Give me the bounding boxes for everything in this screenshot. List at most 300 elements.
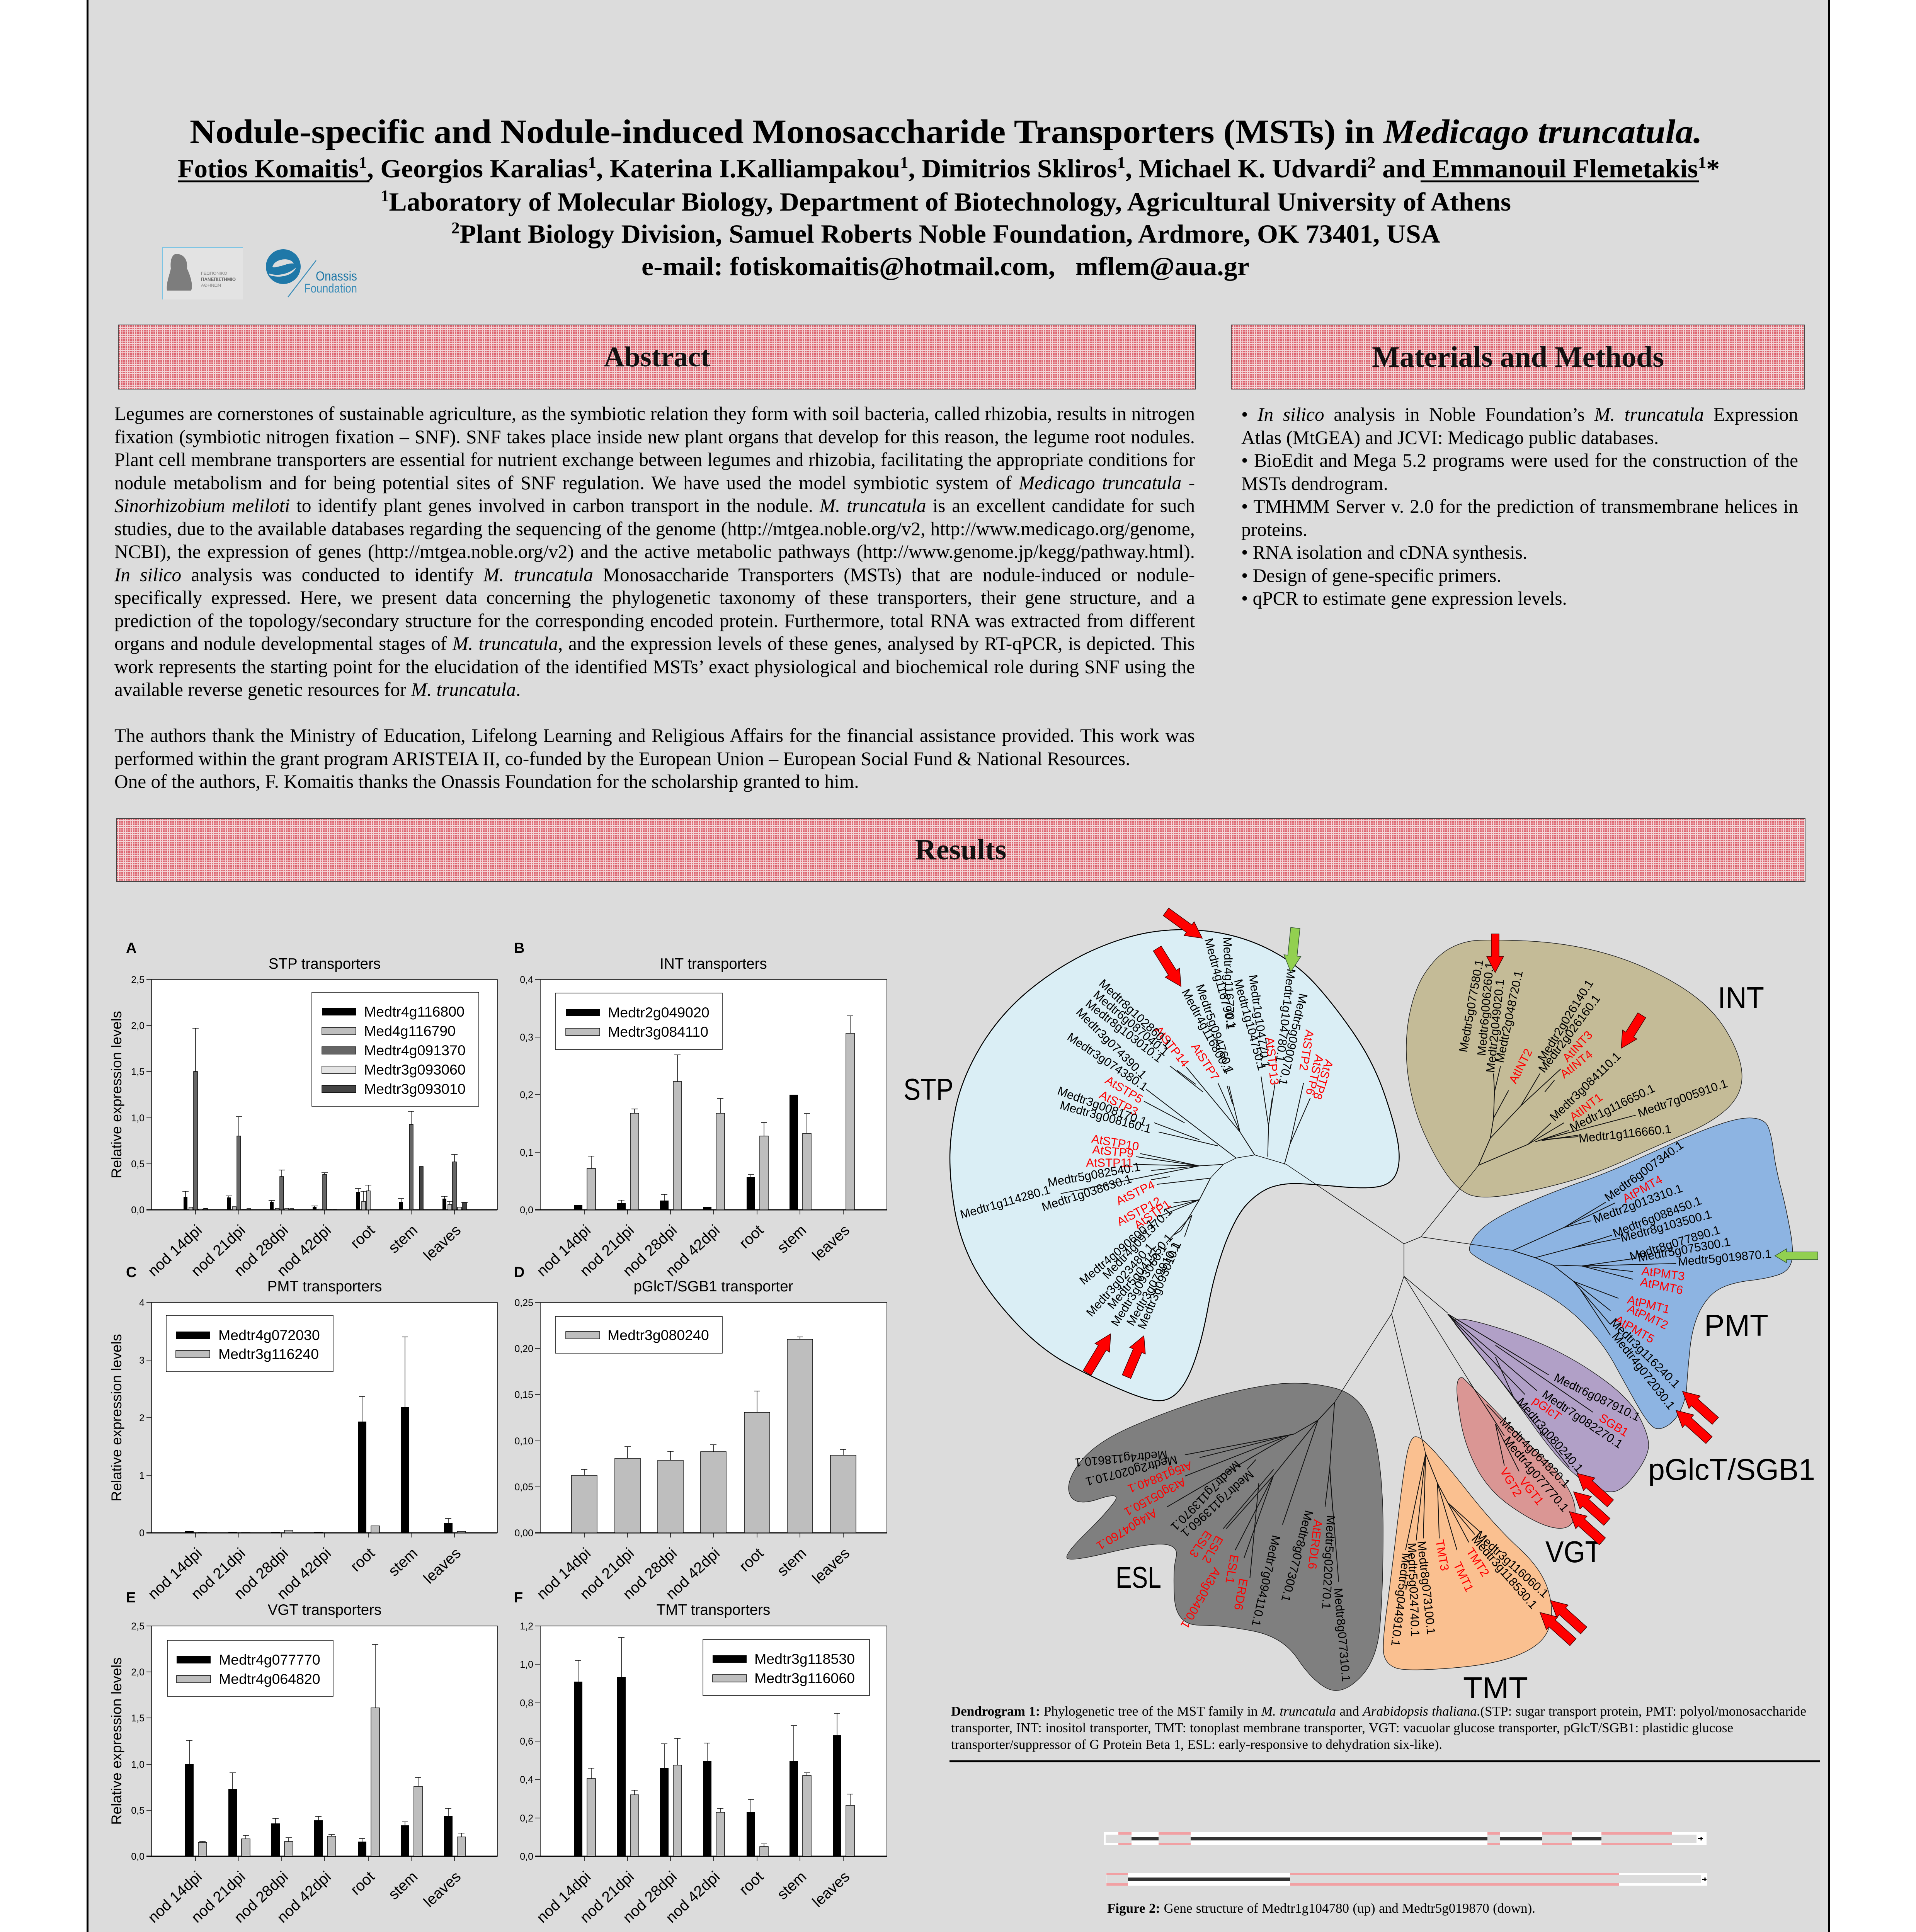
labels: STP clade: Medtr5g090070.1: [1276, 992, 1310, 1087]
authors: 1: [1698, 154, 1706, 172]
chart F: TMT transporters: 0,6: [520, 1736, 533, 1747]
chart C: PMT transporters: leaves: [420, 1544, 464, 1587]
labels: PMT clade: Medtr3g116240.1: [1608, 1316, 1683, 1391]
labels: STP clade: Medtr5g082540.1: [1046, 1160, 1142, 1189]
chart C: PMT transporters: 3: [139, 1355, 145, 1366]
clade blob: PMT: [1469, 1118, 1792, 1429]
text block: abstract: Plant cell membrane transporters are essential for nutrient exchange between legumes and rhizobia, facilitating the appropriate conditions for: [114, 449, 1195, 470]
logo: Onassis Foundation: Foundation: [304, 281, 357, 295]
chart F: TMT transporters: stem: [774, 1868, 810, 1903]
labels: ESL clade: Medtr5g020270.1: [1319, 1515, 1338, 1609]
heading: Materials and Methods: Materials and Methods: [1372, 341, 1664, 373]
text block: abstract: specifically expressed. Here, we present data concerning the phylogenetic taxonomy of these transporters, their gene structure, and a: [114, 587, 1195, 608]
chart F: TMT transporters: 0,4: [520, 1774, 533, 1785]
chart A: STP transporters: A: [126, 940, 136, 956]
arrows: highlighted genes: [1080, 905, 1818, 1648]
labels: STP clade: Medtr6g087040.1: [1091, 988, 1171, 1059]
labels: ESL clade: ERD6: [1232, 1577, 1250, 1611]
chart C: PMT transporters: PMT transporters: [267, 1278, 382, 1295]
branches: STP: [1061, 1066, 1310, 1243]
chart A: STP transporters: 2,0: [131, 1020, 145, 1031]
chart B: INT transporters: nod 14dpi: [533, 1221, 594, 1280]
chart D: pGlcT/SGB1 transporter: nod 28dpi: [619, 1544, 680, 1603]
labels: STP clade: Medtr3g079910.1: [1124, 1240, 1183, 1328]
chart E: VGT transporters: root: [347, 1868, 378, 1898]
clade blob: VGT: [1457, 1378, 1575, 1528]
chart C: PMT transporters: root: [347, 1544, 378, 1575]
labels: TMT clade: TMT1: [1451, 1560, 1476, 1594]
chart D: pGlcT/SGB1 transporter: nod 14dpi: [533, 1544, 594, 1603]
text block: materials and methods: • Design of gene-specific primers.: [1241, 565, 1501, 586]
labels: PMT clade: AtPMT2: [1625, 1301, 1670, 1332]
chart D: pGlcT/SGB1 transporter: 0,10: [514, 1436, 533, 1447]
labels: STP clade: AtSTP2: [1297, 1029, 1317, 1071]
authors: , Dimitrios Skliros: [909, 154, 1117, 183]
chart C: PMT transporters: 2: [139, 1413, 145, 1423]
text block: materials and methods: • qPCR to estimate gene expression levels.: [1241, 588, 1567, 609]
chart C: PMT transporters: nod 28dpi: [231, 1544, 291, 1603]
labels: ESL clade: ESL1: [1223, 1554, 1241, 1585]
labels: STP clade: AtSTP9: [1092, 1143, 1134, 1160]
chart B: INT transporters: stem: [774, 1221, 810, 1257]
chart F: TMT transporters: leaves: [809, 1868, 853, 1910]
gene structure figure: [1104, 1832, 1707, 1886]
labels: INT clade: Medtr6g006260.1: [1475, 961, 1496, 1056]
legend D: Medtr3g080240: [607, 1327, 709, 1343]
chart E: VGT transporters: 1,5: [131, 1713, 145, 1724]
gene: Medtr1g104780: [1104, 1832, 1707, 1845]
chart A: STP transporters: root: [347, 1221, 378, 1252]
labels: TMT clade: Medtr5g024740.1: [1405, 1543, 1422, 1637]
labels: STP clade: Medtr1g104750.1: [1232, 978, 1269, 1072]
labels: ESL clade: ESL2: [1200, 1533, 1226, 1566]
authors: Fotios Komaitis: [178, 154, 355, 183]
labels: pGlcT/SGB1 and VGT clades: Medtr7g082270.1: [1540, 1388, 1625, 1451]
labels: STP clade: Medtr5g041550.1: [1104, 1231, 1176, 1311]
chart A: STP transporters: 1,5: [131, 1066, 145, 1077]
chart E: VGT transporters: VGT transporters: [268, 1602, 381, 1618]
chart C: PMT transporters: nod 42dpi: [274, 1544, 334, 1603]
chart B: INT transporters: 0,2: [520, 1090, 533, 1100]
chart B: INT transporters: INT transporters: [660, 956, 767, 972]
chart A: STP transporters: leaves: [420, 1221, 464, 1264]
heading: Results: [116, 818, 1805, 882]
labels: INT clade: Medtr2g049020.1: [1484, 978, 1507, 1073]
labels: STP clade: AtSTP1: [1132, 1197, 1173, 1232]
labels: pGlcT/SGB1 and VGT clades: Medtr4g064820.1: [1497, 1415, 1573, 1490]
chart B: INT transporters: 0,0: [520, 1205, 533, 1216]
clade names: INT: [1718, 981, 1764, 1015]
chart E: VGT transporters: [108, 1590, 497, 1926]
chart B: INT transporters: leaves: [809, 1221, 853, 1264]
chart E: VGT transporters: Relative expression levels: [108, 1657, 124, 1825]
labels: INT clade: Medtr2g048720.1: [1493, 969, 1525, 1064]
labels: STP clade: [958, 937, 1336, 1331]
text block: abstract: One of the authors, F. Komaitis thanks the Onassis Foundation for the scholarship granted to him.: [114, 771, 859, 792]
chart D: pGlcT/SGB1 transporter: leaves: [809, 1544, 853, 1587]
labels: PMT clade: Medtr5g075300.1: [1637, 1235, 1732, 1264]
legend F: [703, 1639, 870, 1696]
labels: PMT clade: Medtr6g088450.1: [1611, 1194, 1703, 1240]
labels: STP clade: Medtr3g093060.1: [1108, 1242, 1169, 1328]
chart D: pGlcT/SGB1 transporter: 0,15: [514, 1389, 533, 1400]
chart A: STP transporters: 0,0: [131, 1205, 145, 1216]
caption: dendrogram 1: transporter/suppressor of G Protein Beta 1, ESL: early-responsive to dehydration six-like).: [951, 1737, 1442, 1752]
chart F: TMT transporters: nod 28dpi: [619, 1868, 680, 1926]
gene: Medtr5g019870: [1106, 1873, 1707, 1886]
logo: agricultural university: ΠΑΝΕΠΙΣΤΗΜΙΟ: [201, 277, 236, 282]
authors: 2: [1367, 154, 1376, 172]
labels: pGlcT/SGB1 and VGT clades: Medtr6g087910.1: [1552, 1371, 1642, 1424]
authors: and Emmanouil Flemetakis: [1376, 154, 1698, 183]
clade names: PMT: [1704, 1308, 1768, 1342]
clade blob: INT: [1406, 940, 1742, 1197]
chart A: STP transporters: Relative expression levels: [108, 1011, 124, 1179]
branches: PMT: [1513, 1202, 1676, 1335]
chart B: INT transporters: nod 21dpi: [577, 1221, 637, 1280]
chart E: VGT transporters: nod 42dpi: [274, 1868, 334, 1926]
chart F: TMT transporters: 1,0: [520, 1659, 533, 1670]
chart B: INT transporters: B: [514, 940, 524, 956]
chart E: VGT transporters: 0,5: [131, 1805, 145, 1816]
caption: figure 2: Figure 2: Gene structure of Medtr1g104780 (up) and Medtr5g019870 (down).: [1107, 1901, 1535, 1916]
logo: agricultural university: ΑΘΗΝΩΝ: [201, 283, 221, 288]
chart C: PMT transporters: nod 14dpi: [145, 1544, 205, 1603]
clade blob: TMT: [1383, 1437, 1552, 1670]
legend A: Med4g116790: [364, 1023, 456, 1039]
authors: , Michael K. Udvardi: [1125, 154, 1367, 183]
title and authors header: [178, 113, 1720, 281]
labels: INT clade: Medtr1g116660.1: [1578, 1122, 1672, 1145]
chart E: VGT transporters: 2,0: [131, 1667, 145, 1678]
authors: 1: [588, 154, 596, 172]
chart D: pGlcT/SGB1 transporter: nod 42dpi: [662, 1544, 723, 1603]
labels: ESL clade: Medtr7g113970.1: [1168, 1458, 1243, 1533]
labels: pGlcT/SGB1 and VGT clades: Medtr4g077770.1: [1501, 1434, 1572, 1514]
chart D: pGlcT/SGB1 transporter: root: [736, 1544, 767, 1575]
labels: pGlcT/SGB1 and VGT clades: pGlcT: [1530, 1394, 1564, 1423]
chart C: PMT transporters: Relative expression levels: [108, 1334, 124, 1502]
clade names: TMT: [1463, 1671, 1528, 1705]
text block: materials and methods: proteins.: [1241, 519, 1307, 540]
labels: PMT clade: Medtr8g077890.1: [1628, 1223, 1722, 1263]
clade names: pGlcT/SGB1: [1648, 1452, 1815, 1486]
labels: INT clade: Medtr3g084110.1: [1547, 1049, 1623, 1124]
labels: PMT clade: AtPMT1: [1626, 1293, 1671, 1316]
text block: abstract: organs and nodule developmental stages of M. truncatula, and the expression levels of these genes, analysed by RT-qPCR, is depicted. This: [114, 633, 1195, 654]
chart F: TMT transporters: 1,2: [520, 1621, 533, 1632]
text block: abstract: [114, 402, 1195, 793]
text block: abstract: prediction of the topology/secondary structure for the corresponding encoded protein. Furthermore, total RNA was extracted from different: [114, 610, 1195, 631]
labels: PMT clade: AtPMT4: [1620, 1173, 1664, 1205]
labels: INT clade: AtINT3: [1560, 1028, 1595, 1065]
labels: STP clade: AtSTP10: [1091, 1132, 1140, 1153]
chart D: pGlcT/SGB1 transporter: 0,20: [514, 1344, 533, 1354]
labels: pGlcT/SGB1 and VGT clades: VGT1: [1516, 1475, 1547, 1508]
legend F: Medtr3g118530: [754, 1651, 855, 1667]
text block: materials and methods: [1241, 403, 1798, 610]
legend E: Medtr4g077770: [219, 1651, 320, 1668]
chart D: pGlcT/SGB1 transporter: D: [514, 1264, 524, 1281]
labels: INT clade: AtINT2: [1506, 1046, 1535, 1086]
chart E: VGT transporters: leaves: [420, 1868, 464, 1910]
labels: TMT clade: TMT2: [1463, 1546, 1492, 1579]
chart C: PMT transporters: C: [126, 1264, 136, 1281]
chart F: TMT transporters: TMT transporters: [657, 1602, 770, 1618]
chart B: INT transporters: 0,3: [520, 1032, 533, 1043]
affiliation 1: 1: [381, 187, 389, 205]
legend F: Medtr3g116060: [754, 1670, 855, 1686]
text block: abstract: fixation (symbiotic nitrogen fixation – SNF). SNF takes place inside new plant organs that develop for this reason, the legume root nodules.: [114, 426, 1195, 447]
chart E: VGT transporters: 1,0: [131, 1759, 145, 1770]
chart E: VGT transporters: 2,5: [131, 1621, 145, 1632]
legend C: Medtr3g116240: [218, 1346, 319, 1362]
email: e-mail: fotiskomaitis@hotmail.com, mflem@aua.gr: [642, 252, 1249, 281]
branches: INT: [1479, 1066, 1636, 1165]
text block: abstract: In silico analysis was conducted to identify M. truncatula Monosaccharide Transporters (MSTs) that are nodule-induced or nodule-: [114, 564, 1195, 585]
chart A: STP transporters: 2,5: [131, 975, 145, 985]
chart D: pGlcT/SGB1 transporter: pGlcT/SGB1 transporter: [634, 1278, 793, 1295]
labels: STP clade: Medtr3g008160.1: [1058, 1099, 1153, 1136]
chart F: TMT transporters: nod 42dpi: [662, 1868, 723, 1926]
chart F: TMT transporters: 0,0: [520, 1851, 533, 1862]
labels: ESL clade: At3g05150.1: [1122, 1475, 1188, 1519]
labels: ESL clade: Medtr2g020710.1: [1084, 1453, 1179, 1488]
labels: pGlcT/SGB1 and VGT clades: VGT2: [1497, 1465, 1525, 1499]
labels: STP clade: AtSTP7: [1189, 1041, 1222, 1083]
text block: abstract: performed within the grant program ARISTEIA II, co-funded by the European Union – European Social Fund & National Resources.: [114, 748, 1130, 769]
chart E: VGT transporters: stem: [385, 1868, 421, 1903]
text block: materials and methods: • RNA isolation and cDNA synthesis.: [1241, 542, 1527, 563]
labels: INT clade: [1457, 958, 1729, 1145]
labels: INT clade: Medtr7g005910.1: [1636, 1077, 1729, 1120]
logo: agricultural university: [162, 247, 243, 299]
labels: TMT clade: Medtr5g044910.1: [1389, 1552, 1413, 1647]
labels: STP clade: AtSTP3: [1097, 1088, 1140, 1119]
chart C: PMT transporters: 1: [139, 1470, 145, 1481]
authors: *: [1706, 154, 1720, 183]
authors: , Georgios Karalias: [367, 154, 588, 183]
labels: pGlcT/SGB1 and VGT clades: SGB1: [1597, 1411, 1631, 1439]
labels: ESL clade: AtERDL6: [1305, 1519, 1325, 1570]
labels: STP clade: AtSTP8: [1310, 1058, 1336, 1101]
labels: PMT clade: AtPMT6: [1639, 1275, 1684, 1297]
labels: TMT clade: Medtr3g118530.1: [1469, 1532, 1540, 1611]
chart F: TMT transporters: 0,8: [520, 1698, 533, 1709]
text block: abstract: work represents the starting point for the elucidation of the identified MSTs’ exact physiological and biochemical role during SNF using the: [114, 656, 1195, 677]
labels: STP clade: Medtr4g091370.1: [1100, 1204, 1175, 1282]
heading: Abstract: [118, 325, 1196, 389]
legend C: Medtr4g072030: [218, 1327, 320, 1343]
clade blob: ESL: [1067, 1383, 1383, 1690]
chart B: INT transporters: root: [736, 1221, 767, 1252]
chart E: VGT transporters: nod 21dpi: [188, 1868, 248, 1926]
legend B: [555, 993, 722, 1049]
text block: abstract: NCBI), the expression of genes (http://mtgea.noble.org/v2) and the active metabolic pathways (http://www.genome.jp/kegg/pathway.html).: [114, 541, 1195, 562]
labels: ESL clade: [1074, 1448, 1353, 1682]
labels: pGlcT/SGB1 and VGT clades: [1497, 1371, 1642, 1514]
labels: STP clade: AtSTP5: [1103, 1073, 1145, 1106]
legend E: Medtr4g064820: [219, 1671, 320, 1687]
caption: dendrogram 1: Dendrogram 1: Phylogenetic tree of the MST family in M. truncatula and Arabidopsis thaliana.(STP: sugar transport protein, PMT: polyol/monosaccharide: [951, 1704, 1806, 1719]
labels: STP clade: Medtr4g116790.1: [1202, 937, 1239, 1030]
chart F: TMT transporters: nod 14dpi: [533, 1868, 594, 1926]
legend A: [312, 992, 479, 1106]
chart D: pGlcT/SGB1 transporter: 0,05: [514, 1482, 533, 1493]
legend C: [166, 1315, 333, 1372]
labels: TMT clade: [1389, 1528, 1551, 1647]
labels: PMT clade: Medtr8g103500.1: [1619, 1208, 1713, 1245]
labels: ESL clade: Medtr7g094110.1: [1249, 1534, 1283, 1628]
chart A: STP transporters: 0,5: [131, 1159, 145, 1170]
legend A: Medtr4g091370: [364, 1042, 466, 1058]
logo: Onassis Foundation: Onassis: [316, 269, 357, 284]
text block: abstract: The authors thank the Ministry of Education, Lifelong Learning and Religious Affairs for the financial assistance provided. This work was: [114, 725, 1195, 746]
text block: materials and methods: • In silico analysis in Noble Foundation’s M. truncatula Expression: [1241, 404, 1798, 425]
text block: abstract: nodule metabolism and for being potential sites of SNF regulation. We have used the model symbiotic system of Medicago truncatula -: [114, 472, 1195, 493]
labels: STP clade: Medtr5g094760.1: [1193, 982, 1237, 1076]
chart B: INT transporters: nod 28dpi: [619, 1221, 680, 1280]
affiliation 2: Plant Biology Division, Samuel Roberts Noble Foundation, Ardmore, OK 73401, USA: [460, 219, 1440, 248]
chart B: INT transporters: [514, 940, 887, 1280]
labels: PMT clade: Medtr5g019870.1: [1677, 1247, 1772, 1269]
labels: STP clade: Medtr1g038630.1: [1040, 1172, 1133, 1214]
labels: INT clade: Medtr1g116650.1: [1567, 1082, 1657, 1134]
clade names: [904, 981, 1815, 1705]
labels: STP clade: AtSTP12: [1115, 1194, 1163, 1229]
chart E: VGT transporters: nod 28dpi: [231, 1868, 291, 1926]
chart E: VGT transporters: E: [126, 1590, 136, 1606]
labels: STP clade: Medtr8g103010.1: [1083, 997, 1166, 1065]
chart B: INT transporters: 0,1: [520, 1147, 533, 1158]
dendrogram of MST family: [904, 905, 1818, 1705]
chart D: pGlcT/SGB1 transporter: 0,00: [514, 1528, 533, 1539]
chart D: pGlcT/SGB1 transporter: 0,25: [514, 1298, 533, 1308]
logo: agricultural university: ΓΕΩΠΟΝΙΚΟ: [201, 271, 227, 276]
labels: TMT clade: Medtr3g116060.1: [1473, 1528, 1551, 1600]
chart B: INT transporters: nod 42dpi: [662, 1221, 723, 1280]
legend A: Medtr3g093010: [364, 1081, 466, 1097]
labels: ESL clade: At3g05400.1: [1178, 1565, 1223, 1631]
heading: Results: Results: [915, 833, 1006, 866]
chart F: TMT transporters: [514, 1590, 887, 1926]
chart F: TMT transporters: nod 21dpi: [577, 1868, 637, 1926]
text block: abstract: studies, due to the available databases regarding the sequencing of the genome (http://mtgea.noble.org/v2, http://www.medicago.org/genome,: [114, 518, 1195, 539]
labels: PMT clade: AtPMT5: [1613, 1313, 1657, 1346]
labels: pGlcT/SGB1 and VGT clades: Medtr3g080240.1: [1514, 1395, 1586, 1475]
labels: STP clade: AtSTP4: [1114, 1178, 1157, 1208]
labels: ESL clade: ESL3: [1187, 1528, 1215, 1560]
legend D: [555, 1316, 722, 1353]
chart A: STP transporters: STP transporters: [269, 956, 381, 972]
chart C: PMT transporters: stem: [385, 1544, 421, 1580]
labels: ESL clade: Medtr8g077300.1: [1279, 1509, 1316, 1603]
logo: Onassis Foundation: [266, 249, 357, 297]
labels: ESL clade: At4g04760.1: [1094, 1506, 1159, 1553]
affiliation 2: 2: [451, 219, 460, 237]
text block: materials and methods: • BioEdit and Mega 5.2 programs were used for the construction of the: [1241, 450, 1798, 471]
labels: STP clade: AtSTP14: [1152, 1023, 1192, 1070]
chart E: VGT transporters: nod 14dpi: [145, 1868, 205, 1926]
chart C: PMT transporters: 0: [139, 1528, 145, 1539]
labels: PMT clade: Medtr4g072030.1: [1609, 1330, 1678, 1412]
affiliation 1: Laboratory of Molecular Biology, Department of Biotechnology, Agricultural University of Athens: [389, 187, 1511, 216]
legend B: Medtr2g049020: [608, 1004, 710, 1020]
labels: STP clade: Medtr3g074380.1: [1065, 1030, 1150, 1094]
legend A: Medtr4g116800: [364, 1003, 465, 1020]
text block: abstract: Legumes are cornerstones of sustainable agriculture, as the symbiotic relation they form with soil bacteria, called rhizobia, results in nitrogen: [114, 403, 1195, 424]
chart A: STP transporters: nod 42dpi: [274, 1221, 334, 1280]
legend A: Medtr3g093060: [364, 1061, 466, 1078]
labels: STP clade: Medtr3g008170.1: [1056, 1084, 1149, 1129]
heading: Materials and Methods: [1231, 325, 1805, 389]
labels: ESL clade: Medtr4g118610.1: [1074, 1448, 1168, 1469]
clade names: STP: [904, 1072, 953, 1106]
authors: 1: [359, 154, 367, 172]
tree trunk branches: [1210, 1155, 1513, 1454]
chart C: PMT transporters: [108, 1264, 497, 1603]
labels: STP clade: Medtr4g090600.1: [1077, 1216, 1157, 1287]
labels: STP clade: Medtr3g023480.1: [1084, 1240, 1156, 1319]
labels: INT clade: Medtr5g077580.1: [1457, 958, 1486, 1053]
clade names: VGT: [1545, 1535, 1602, 1569]
labels: STP clade: Medtr4g116800.1: [1179, 987, 1235, 1075]
chart C: PMT transporters: nod 21dpi: [188, 1544, 248, 1603]
labels: STP clade: Medtr3g093010.1: [1135, 1239, 1184, 1331]
text block: abstract: Sinorhizobium meliloti to identify plant genes involved in carbon transport in the nodule. M. truncatula is an excellent candidate for such: [114, 495, 1195, 516]
labels: STP clade: AtSTP6: [1303, 1053, 1326, 1097]
labels: STP clade: Medtr1g104780.1: [1273, 968, 1298, 1063]
labels: PMT clade: Medtr6g007340.1: [1602, 1138, 1686, 1204]
chart A: STP transporters: 1,0: [131, 1113, 145, 1124]
labels: STP clade: Medtr4g116770.1: [1220, 937, 1237, 1030]
clade blob: pGlcT/SGB1: [1454, 1319, 1649, 1492]
labels: STP clade: AtSTP11: [1086, 1156, 1133, 1169]
caption: dendrogram 1: transporter, INT: inositol transporter, TMT: tonoplast membrane transporter, VGT: vacuolar glucose transporter, pGlcT/SGB1: plastidic glucose: [951, 1720, 1733, 1735]
labels: STP clade: Medtr8g102860.1: [1096, 976, 1174, 1051]
labels: INT clade: Medtr2g026140.1: [1535, 977, 1596, 1064]
chart A: STP transporters: [108, 940, 497, 1280]
labels: PMT clade: Medtr2g013310.1: [1591, 1181, 1684, 1226]
legend E: [167, 1640, 333, 1696]
chart D: pGlcT/SGB1 transporter: nod 21dpi: [577, 1544, 637, 1603]
labels: ESL clade: Medtr8g077310.1: [1331, 1587, 1353, 1682]
chart A: STP transporters: nod 14dpi: [145, 1221, 205, 1280]
chart D: pGlcT/SGB1 transporter: stem: [774, 1544, 810, 1580]
title: Nodule-specific and Nodule-induced Monosaccharide Transporters (MSTs) in Medicago truncatula.: [190, 113, 1702, 151]
labels: TMT clade: Medtr8g073100.1: [1415, 1540, 1438, 1635]
text block: abstract: available reverse genetic resources for M. truncatula.: [114, 679, 521, 700]
labels: INT clade: AtINT4: [1557, 1048, 1595, 1081]
labels: STP clade: Medtr1g114280.1: [958, 1183, 1052, 1221]
legend B: Medtr3g084110: [608, 1024, 708, 1040]
labels: INT clade: AtINT1: [1567, 1090, 1605, 1124]
labels: INT clade: Medtr2g026160.1: [1536, 992, 1603, 1075]
chart F: TMT transporters: 0,2: [520, 1813, 533, 1824]
branches: pGlcT, VGT, TMT, ESL: [1167, 1314, 1593, 1582]
chart A: STP transporters: nod 21dpi: [188, 1221, 248, 1280]
chart D: pGlcT/SGB1 transporter: [514, 1264, 887, 1603]
chart A: STP transporters: nod 28dpi: [231, 1221, 291, 1280]
labels: ESL clade: At5g18840.1: [1126, 1459, 1194, 1496]
chart B: INT transporters: 0,4: [520, 975, 533, 985]
authors: 1: [900, 154, 909, 172]
text block: materials and methods: MSTs dendrogram.: [1241, 473, 1388, 494]
caption: dendrogram 1: [951, 1703, 1806, 1753]
clade blob: STP: [950, 930, 1399, 1401]
labels: STP clade: Medtr3g074390.1: [1074, 1005, 1149, 1081]
text block: materials and methods: • TMHMM Server v. 2.0 for the prediction of transmembrane helices in: [1241, 496, 1798, 517]
